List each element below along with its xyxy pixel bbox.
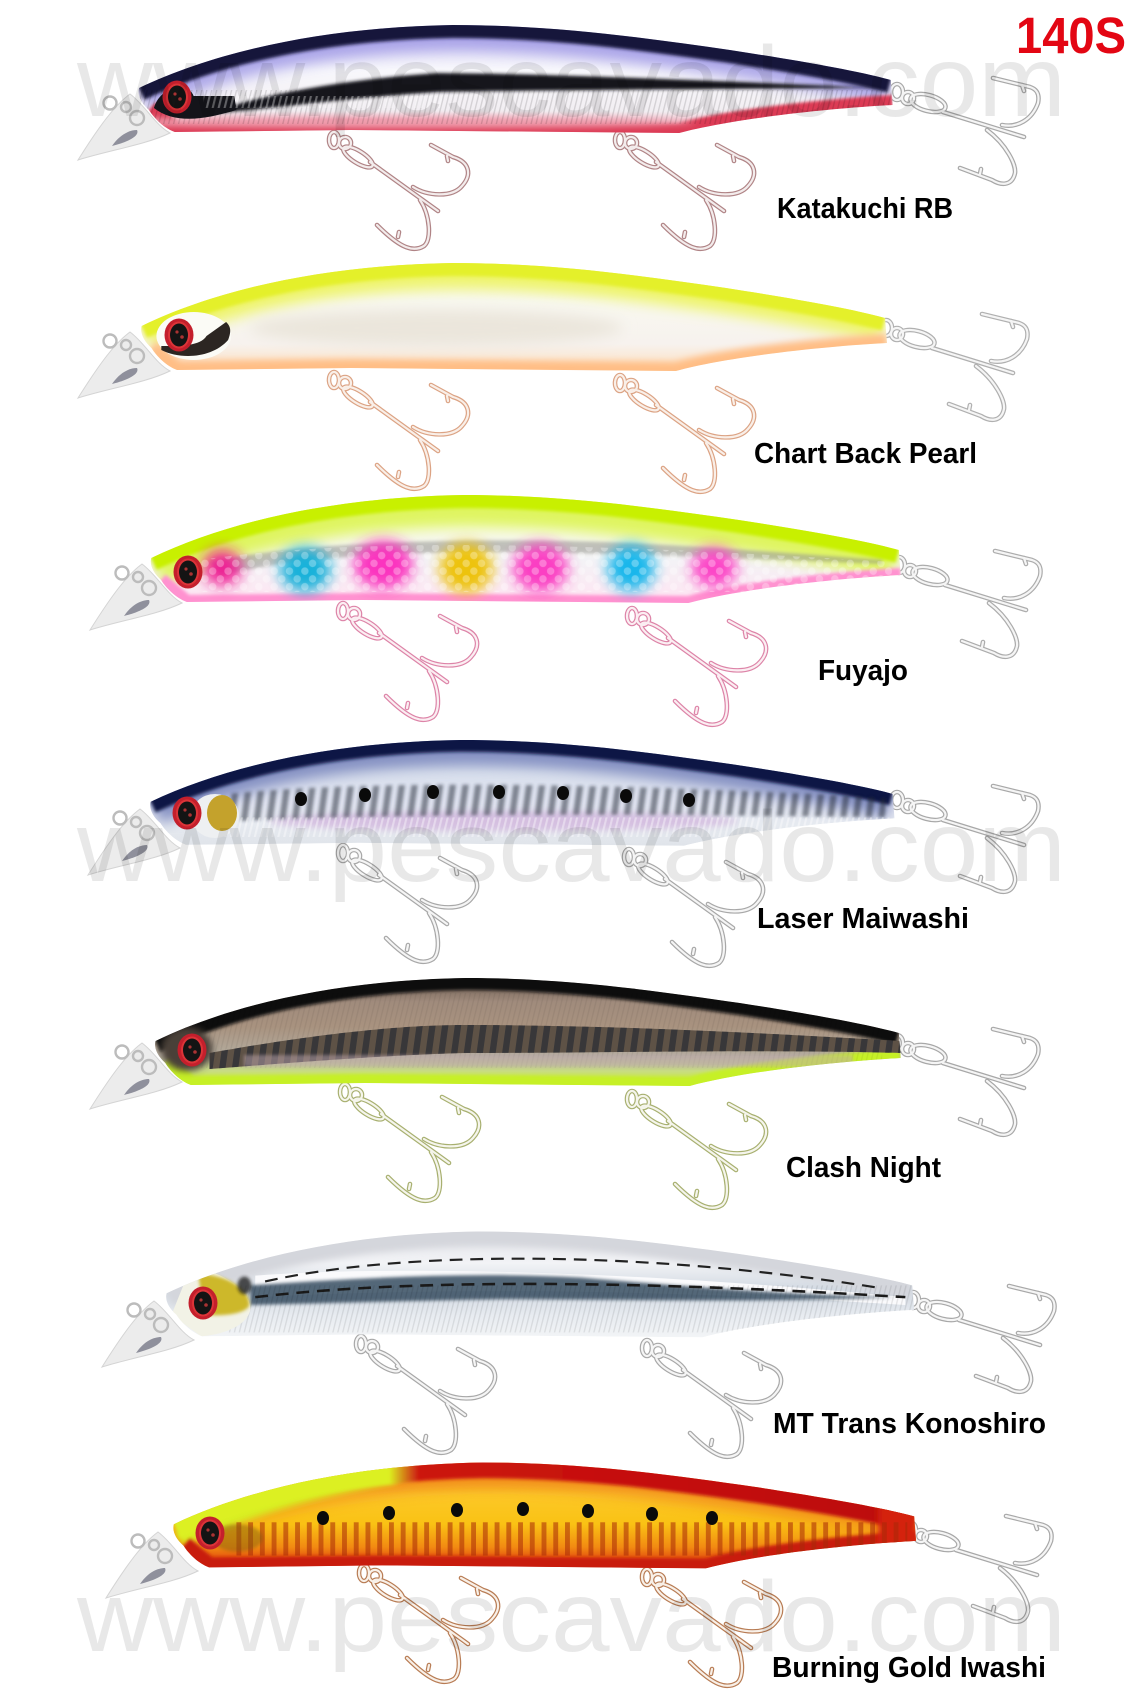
body (166, 1232, 915, 1337)
lure: Fuyajo (90, 495, 1041, 725)
colour spots (203, 541, 737, 593)
black dots (295, 785, 695, 807)
hook: tail treble (891, 1029, 1039, 1135)
hook: front treble (356, 1336, 495, 1453)
label: MT Trans Konoshiro: MT Trans Konoshiro (773, 1408, 1046, 1440)
lure: Laser Maiwashi (88, 740, 1039, 966)
label: Chart Back Pearl: Chart Back Pearl (754, 438, 977, 470)
watermark text: www.pescavado.com (76, 1561, 1066, 1673)
lure: MT Trans Konoshiro (102, 1232, 1055, 1457)
hook: tail treble (893, 551, 1041, 657)
head patch (191, 794, 239, 838)
hook: middle treble (627, 608, 766, 725)
hook: middle treble (615, 132, 754, 249)
hook: tail treble (907, 1286, 1055, 1392)
label: Clash Night: Clash Night (786, 1152, 941, 1184)
hook: front treble (338, 845, 477, 962)
hook: front treble (340, 1084, 479, 1201)
hook: front treble (359, 1565, 498, 1682)
hook: middle treble (615, 375, 754, 492)
label: Fuyajo: Fuyajo (818, 655, 908, 687)
watermark text: www.pescavado.com (76, 26, 1066, 138)
hook: tail treble (880, 314, 1028, 420)
hook: tail treble (904, 1516, 1052, 1622)
label: Laser Maiwashi: Laser Maiwashi (757, 903, 969, 935)
hook: front treble (329, 132, 468, 249)
lure: Katakuchi RB (78, 25, 1039, 249)
watermark text: www.pescavado.com (76, 791, 1066, 903)
body (150, 740, 896, 846)
body (155, 978, 902, 1086)
black dots (317, 1502, 718, 1525)
hook: tail treble (891, 786, 1039, 892)
hook: middle treble (627, 1091, 766, 1208)
label: Burning Gold Iwashi: Burning Gold Iwashi (772, 1652, 1046, 1684)
body (173, 1462, 917, 1568)
lure: Clash Night (90, 978, 1039, 1208)
model size heading: 140S (1016, 7, 1126, 64)
hook: middle treble (642, 1340, 781, 1457)
hook: front treble (338, 603, 477, 720)
body (99, 25, 894, 133)
hook: middle treble (624, 849, 763, 966)
body (141, 263, 887, 371)
label: Katakuchi RB: Katakuchi RB (777, 193, 953, 225)
body (151, 495, 901, 603)
hook: tail treble (891, 78, 1039, 184)
hook: middle treble (642, 1569, 781, 1686)
lure: Chart Back Pearl (78, 263, 1028, 492)
lure: Burning Gold Iwashi (106, 1462, 1052, 1686)
hook: front treble (329, 372, 468, 489)
